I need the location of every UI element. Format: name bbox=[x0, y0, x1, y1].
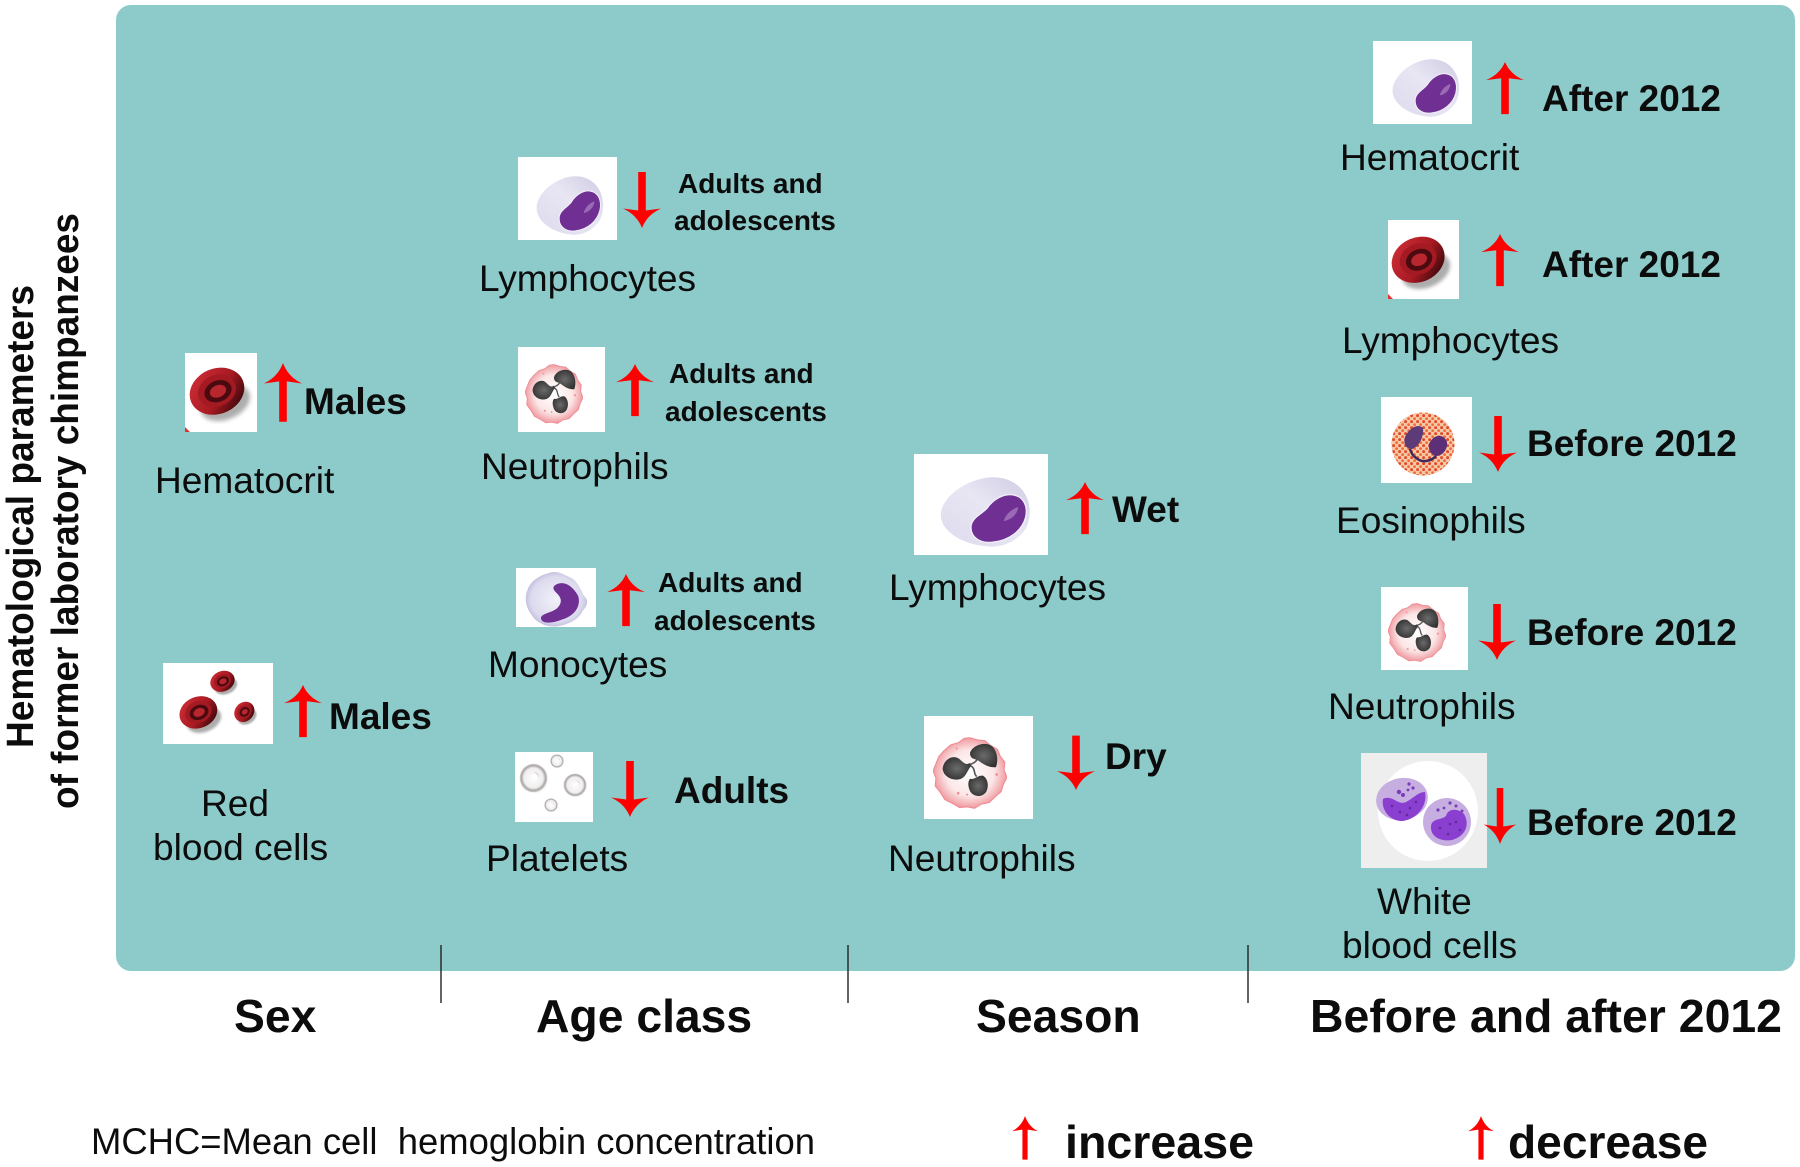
label: adults and adolescents bbox=[665, 358, 827, 427]
label: Hematocrit: Hematocrit bbox=[1340, 136, 1520, 178]
item: hematocrit increase in males bbox=[155, 353, 407, 501]
arrow: down bbox=[623, 172, 661, 228]
label: Lymphocytes: Lymphocytes bbox=[889, 566, 1106, 608]
label: adults and adolescents: Adults and bbox=[669, 358, 814, 389]
item: monocytes increase bbox=[488, 567, 816, 685]
y-axis title: of former laboratory chimpanzees bbox=[45, 213, 87, 809]
legend: decrease bbox=[1468, 1116, 1708, 1167]
column: Age class bbox=[479, 157, 836, 879]
arrow: down bbox=[1057, 736, 1095, 790]
item: lymphocytes increase in wet season bbox=[889, 454, 1179, 608]
icon: red blood cell bbox=[1385, 220, 1459, 299]
arrow: down bbox=[1479, 416, 1517, 472]
item: lymphocytes increase after 2012 bbox=[1342, 220, 1721, 361]
label: Before 2012: Before 2012 bbox=[1527, 423, 1737, 464]
heading: Sex: Sex bbox=[234, 990, 317, 1042]
label: White blood cells: White bbox=[1377, 880, 1472, 922]
legend: increase bbox=[1012, 1116, 1254, 1167]
label: adults and adolescents: Adults and bbox=[658, 567, 803, 598]
item: neutrophils increase bbox=[481, 347, 827, 487]
arrow: up bbox=[1012, 1116, 1038, 1160]
label: Before 2012: Before 2012 bbox=[1527, 802, 1737, 843]
y-axis title bbox=[0, 213, 87, 809]
icon: lymphocyte bbox=[518, 157, 617, 240]
arrow: up bbox=[1481, 234, 1519, 286]
label: adults and adolescents: Adults and bbox=[678, 168, 823, 199]
label: Platelets: Platelets bbox=[486, 837, 628, 879]
label: Adults: Adults bbox=[674, 770, 789, 811]
item: hematocrit increase after 2012 bbox=[1340, 41, 1721, 178]
heading: Before and after 2012: Before and after 2012 bbox=[1310, 990, 1782, 1042]
arrow: up bbox=[1468, 1116, 1494, 1160]
label: Neutrophils: Neutrophils bbox=[1328, 685, 1516, 727]
column: Before and after 2012 bbox=[1328, 41, 1737, 966]
label: White blood cells bbox=[1342, 880, 1517, 966]
y-axis title: Hematological parameters bbox=[0, 285, 42, 748]
label: adults and adolescents: adolescents bbox=[674, 205, 836, 236]
label: After 2012: After 2012 bbox=[1542, 78, 1721, 119]
column dividers bbox=[441, 945, 1248, 1003]
label: decrease: decrease bbox=[1508, 1116, 1708, 1167]
icon: white blood cells bbox=[1361, 753, 1487, 868]
label: adults and adolescents bbox=[654, 567, 816, 636]
icon: lymphocyte bbox=[914, 454, 1048, 555]
label: Monocytes: Monocytes bbox=[488, 643, 667, 685]
label: adults and adolescents bbox=[674, 168, 836, 236]
label: increase: increase bbox=[1065, 1116, 1254, 1167]
label: Neutrophils: Neutrophils bbox=[481, 445, 669, 487]
label: Before 2012: Before 2012 bbox=[1527, 612, 1737, 653]
icon: lymphocyte-like cell bbox=[1373, 41, 1472, 124]
item: neutrophils decrease before 2012 bbox=[1328, 587, 1737, 727]
panel: teal background bbox=[116, 5, 1795, 971]
icon: platelets bbox=[515, 752, 593, 822]
item: red blood cells increase in males bbox=[153, 663, 432, 868]
label: Lymphocytes: Lymphocytes bbox=[479, 257, 696, 299]
label: adults and adolescents: adolescents bbox=[665, 396, 827, 427]
column: Sex bbox=[153, 353, 432, 868]
arrow: up bbox=[264, 363, 302, 422]
item: white blood cells decrease before 2012 bbox=[1342, 753, 1737, 966]
icon: eosinophil bbox=[1381, 397, 1472, 483]
label: Red blood cells bbox=[153, 782, 328, 868]
label: After 2012: After 2012 bbox=[1542, 244, 1721, 285]
icon: neutrophil bbox=[518, 347, 605, 432]
label: Wet: Wet bbox=[1112, 489, 1179, 530]
arrow: down bbox=[1484, 788, 1516, 844]
icon: monocyte bbox=[516, 568, 596, 627]
label: White blood cells: blood cells bbox=[1342, 924, 1517, 966]
item: eosinophils decrease before 2012 bbox=[1336, 397, 1737, 541]
arrow: down bbox=[1478, 604, 1516, 660]
heading: Age class: Age class bbox=[536, 990, 752, 1042]
item: neutrophils decrease in dry season bbox=[888, 716, 1167, 879]
label: Lymphocytes: Lymphocytes bbox=[1342, 319, 1559, 361]
heading: Season: Season bbox=[976, 990, 1141, 1042]
arrow: up bbox=[1486, 62, 1524, 114]
label: Dry: Dry bbox=[1105, 736, 1167, 777]
item: platelets decrease bbox=[486, 752, 789, 879]
label: Red blood cells: Red bbox=[201, 782, 269, 824]
arrow: up bbox=[1066, 482, 1104, 534]
arrow: up bbox=[607, 574, 645, 626]
icon: red blood cell bbox=[183, 353, 257, 432]
label: Neutrophils: Neutrophils bbox=[888, 837, 1076, 879]
label: Males: Males bbox=[304, 381, 407, 422]
footnote: MCHC definition: MCHC=Mean cell hemoglobin concentration bbox=[91, 1120, 815, 1162]
label: adults and adolescents: adolescents bbox=[654, 605, 816, 636]
arrow: up bbox=[284, 685, 322, 737]
label: Red blood cells: blood cells bbox=[153, 826, 328, 868]
icon: neutrophil bbox=[1381, 587, 1468, 670]
column: Season bbox=[888, 454, 1179, 879]
arrow: up bbox=[616, 364, 654, 416]
label: Males: Males bbox=[329, 696, 432, 737]
arrow: down bbox=[611, 761, 649, 817]
icon: neutrophil bbox=[924, 716, 1033, 819]
label: Hematocrit: Hematocrit bbox=[155, 459, 335, 501]
icon: red blood cells bbox=[163, 663, 273, 744]
label: Eosinophils: Eosinophils bbox=[1336, 499, 1526, 541]
item: lymphocytes decrease bbox=[479, 157, 836, 299]
